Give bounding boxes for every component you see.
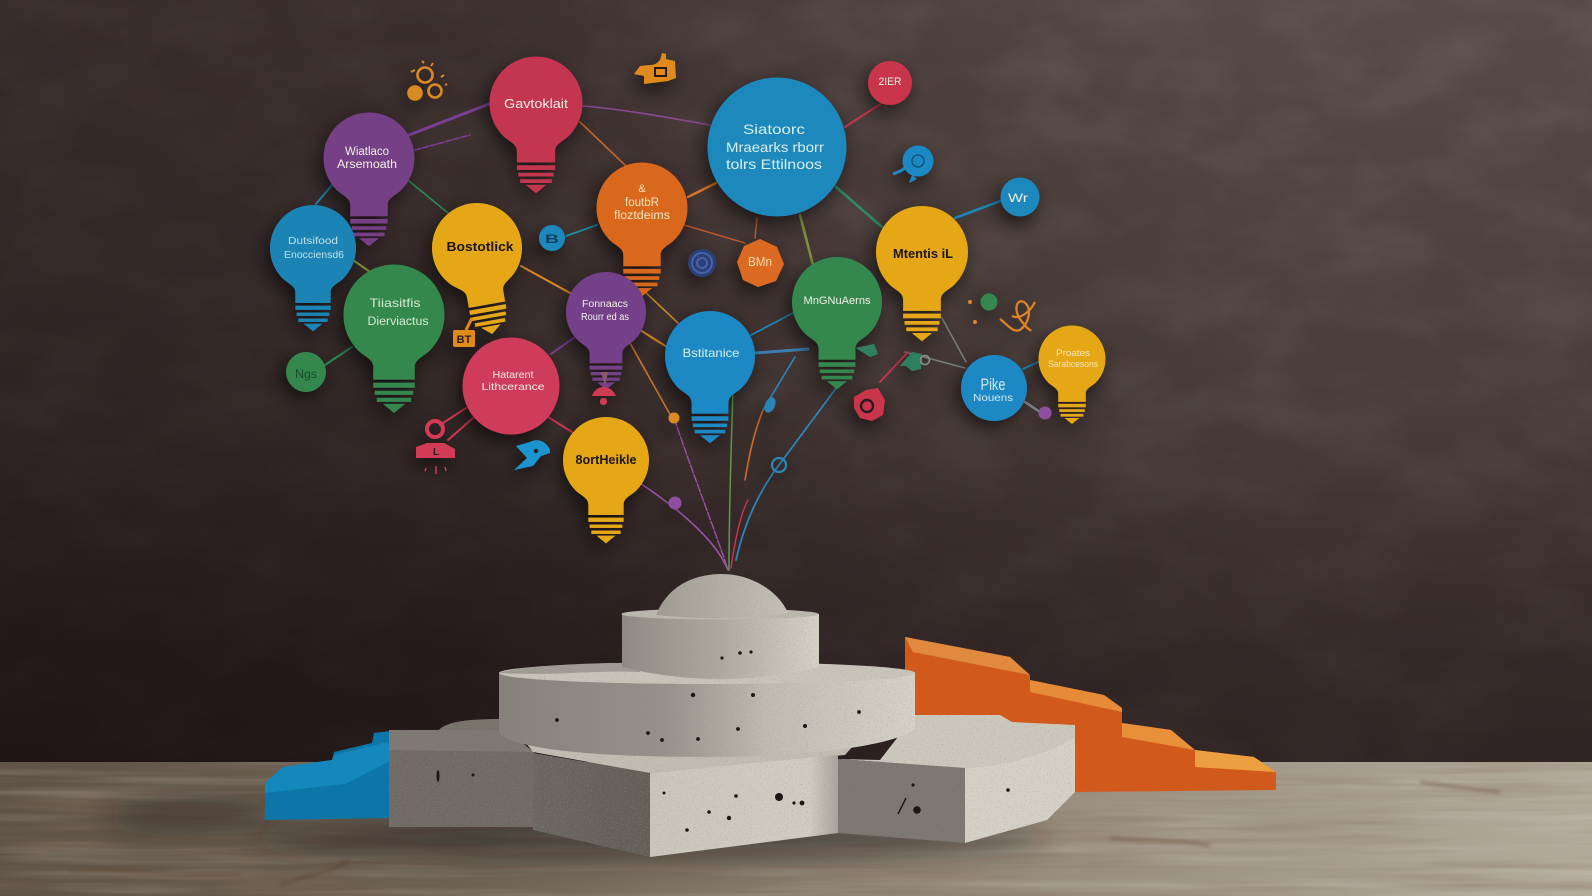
large blue circle: Mraearks rborr bbox=[726, 139, 824, 155]
bulb: purple centre bbox=[566, 272, 646, 390]
bulb: red top: Gavtoklait bbox=[504, 96, 568, 111]
node ring on network bbox=[920, 356, 930, 364]
bulb: purple upper left: Arsemoath bbox=[337, 159, 397, 171]
bulb: orange bbox=[596, 162, 688, 296]
large blue circle: Siatoorc bbox=[743, 121, 805, 137]
bulb: pink circle: Hatarent bbox=[492, 369, 534, 381]
bulb: orange: foutbR bbox=[625, 197, 659, 209]
icon: orange sun cluster bbox=[408, 61, 447, 100]
wooden floor bbox=[0, 762, 1592, 896]
bulb: green large: Dierviactus bbox=[368, 316, 429, 328]
bulb: yellow left bbox=[425, 196, 536, 342]
bulb: blue left: Dutsifood bbox=[288, 236, 338, 247]
green dot node: Ngs bbox=[295, 367, 317, 381]
bulb: purple centre: Rourr ed as bbox=[581, 312, 629, 323]
bulb: blue left bbox=[270, 205, 356, 331]
icon: red stamp: L bbox=[433, 447, 439, 458]
small blue circle bbox=[1000, 178, 1040, 216]
pedestal: centre block bbox=[522, 738, 860, 857]
bulb: green large bbox=[344, 264, 444, 413]
blue circle right: Nouens bbox=[973, 393, 1013, 404]
bulb: blue centre bbox=[665, 311, 755, 443]
small blue circle: Wr bbox=[1008, 191, 1028, 205]
bulb: yellow far right: Proates bbox=[1056, 348, 1090, 359]
icon: teal badge bbox=[539, 225, 565, 251]
icon: navy spiral bbox=[688, 249, 716, 277]
icon: orange lock: BT bbox=[457, 334, 472, 346]
pedestal: middle cylinder bbox=[499, 662, 915, 757]
node: purple dot bbox=[1038, 406, 1052, 420]
bulb: yellow left: Bostotlick bbox=[446, 239, 514, 254]
icon: red swirl blob bbox=[854, 388, 885, 421]
bulb: yellow far right bbox=[1038, 325, 1106, 424]
icon: red cap below purple bulb bbox=[592, 372, 616, 405]
concrete pedestal bbox=[389, 574, 1075, 857]
bulb: green centre bbox=[792, 257, 882, 389]
pedestal: right block bbox=[838, 715, 1075, 843]
orange blob node: BMn bbox=[748, 254, 772, 269]
blue circle right bbox=[961, 355, 1027, 421]
bulb: purple upper left: Wiatlaco bbox=[345, 146, 389, 158]
icon: red stamp bbox=[416, 421, 455, 474]
connector lines network bbox=[316, 103, 1040, 570]
stepped orange blocks bbox=[905, 637, 1276, 792]
icon: orange phone bbox=[634, 53, 676, 84]
icon: teal badge: B bbox=[545, 232, 560, 246]
large blue circle: tolrs Ettilnoos bbox=[726, 156, 822, 172]
small red circle: 2IER bbox=[878, 76, 902, 88]
icon: blue bird bbox=[514, 440, 550, 470]
pedestal: top cylinder bbox=[622, 608, 819, 679]
bulb: yellow right bbox=[876, 206, 968, 341]
green dot node bbox=[286, 352, 326, 392]
icon: blue swirl badge bbox=[893, 146, 934, 183]
large blue circle bbox=[708, 78, 846, 216]
node: green tab on bulb bbox=[856, 344, 878, 357]
node: orange dot bbox=[668, 412, 680, 424]
bulb: green large: Tiiasitfis bbox=[370, 296, 420, 310]
floor shadow under pedestal bbox=[105, 802, 1050, 858]
pedestal: left block bbox=[389, 730, 534, 827]
pedestal: dome bbox=[656, 574, 788, 618]
node: blue ring bbox=[772, 458, 786, 472]
bulb: pink circle: Lithcerance bbox=[482, 381, 545, 393]
bulb: purple centre: Fonnaacs bbox=[582, 299, 628, 310]
bulb: yellow lower: 8ortHeikle bbox=[576, 453, 637, 467]
icon: green blob bbox=[900, 352, 922, 371]
bulb: yellow right: Mtentis iL bbox=[893, 246, 953, 261]
icon: orange squiggle with green dot bbox=[968, 294, 1035, 331]
bulb: green centre: MnGNuAerns bbox=[804, 295, 871, 307]
orange blob node bbox=[737, 239, 784, 287]
bulb: blue centre: Bstitanice bbox=[682, 346, 740, 360]
bulb: purple upper left bbox=[324, 112, 414, 246]
node: purple knot bbox=[668, 496, 682, 510]
node: blue bead bbox=[762, 396, 778, 414]
bulb: pink circle bbox=[462, 338, 560, 434]
pedestal: base bump bbox=[438, 719, 510, 745]
bulb: yellow far right: Sarabcesons bbox=[1048, 359, 1098, 370]
bulb: yellow lower bbox=[563, 417, 649, 543]
blue circle right: Pike bbox=[980, 375, 1006, 394]
bulb: orange: floztdeims bbox=[614, 210, 670, 222]
cluster of idea bulbs bbox=[270, 53, 1106, 543]
stepped blue blocks bbox=[265, 731, 392, 820]
bulb: red top bbox=[490, 56, 582, 193]
concrete pits bbox=[436, 650, 1010, 832]
bulb: orange: & bbox=[638, 183, 646, 195]
icon: orange lock bbox=[453, 318, 475, 347]
small red circle bbox=[868, 61, 912, 105]
bulb: blue left: Enocciensd6 bbox=[284, 250, 344, 261]
